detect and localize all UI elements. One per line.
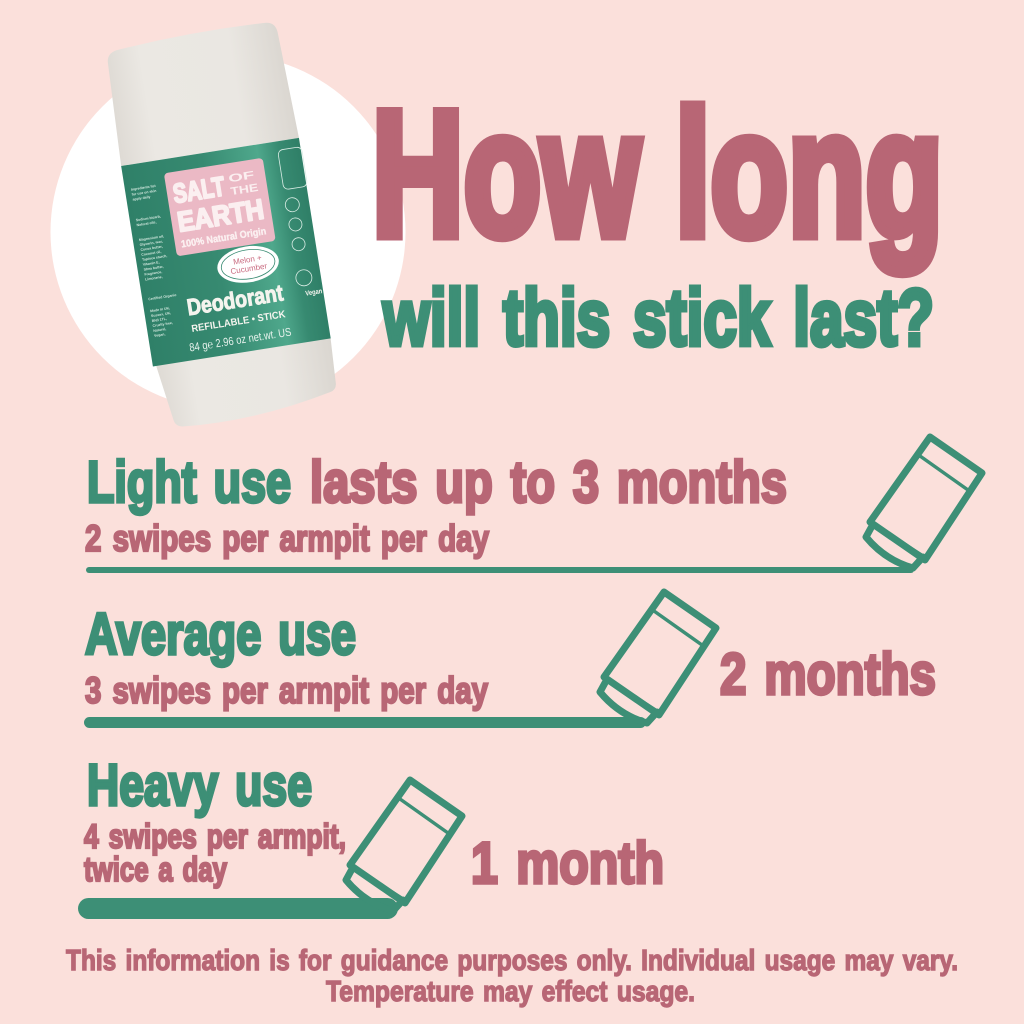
disclaimer	[66, 945, 958, 1008]
light use duration: lasts up to 3 months	[310, 450, 787, 515]
flavour badge	[215, 242, 282, 287]
logo panel	[164, 158, 276, 256]
icon: stick	[866, 437, 982, 568]
product type: REFILLABLE • STICK	[191, 309, 287, 335]
flavour badge: Melon +	[233, 253, 263, 267]
icon: stick	[346, 780, 462, 911]
heavy use bar	[78, 898, 398, 919]
logo panel: SALT	[171, 171, 227, 209]
logo panel: EARTH	[175, 193, 266, 238]
heavy use duration: 1 month	[471, 831, 664, 896]
ingredients list: for use on skin	[131, 189, 157, 197]
heavy use detail: 4 swipes per armpit,	[84, 818, 346, 856]
average use detail: 3 swipes per armpit per day	[85, 670, 488, 711]
ingredients list: Vegan,	[154, 332, 166, 338]
ingredients list: Natural oils,	[136, 220, 157, 227]
average use heading: Average use	[85, 602, 356, 667]
ingredients list: Sodium bicarb,	[136, 214, 161, 222]
logo panel: THE	[230, 182, 259, 198]
product: deodorant stick	[102, 19, 342, 431]
ingredients list: apply daily	[132, 195, 151, 202]
net weight: 84 g℮ 2.96 oz net.wt. US	[189, 326, 292, 354]
light use detail: 2 swipes per armpit per day	[85, 518, 489, 559]
ingredients list: Glycerin, wax,	[139, 239, 163, 247]
ingredients list: Coconut oil,	[141, 250, 162, 257]
row: light use	[85, 437, 982, 573]
ingredients list: Fragrance,	[144, 270, 162, 277]
ingredients list: BN3 1TL,	[151, 317, 167, 323]
stick base	[156, 336, 341, 431]
ingredients list: Vitamin E,	[143, 260, 160, 267]
green label	[121, 138, 331, 367]
stick cap	[102, 19, 299, 166]
white circle	[50, 54, 406, 410]
light use heading: Light use	[87, 450, 291, 515]
ingredients list: Natural,	[153, 327, 167, 333]
flavour badge: Cucumber	[230, 261, 268, 276]
icon: stick	[600, 592, 716, 723]
ingredients list: Sussex, UK,	[151, 311, 171, 318]
ingredients list: Shea butter,	[143, 265, 164, 272]
certification icons	[276, 147, 325, 299]
ingredients list: Limonene,	[145, 275, 163, 282]
heavy use detail line 2: twice a day	[84, 851, 227, 889]
ingredients list: Tapioca starch,	[142, 254, 168, 262]
row: heavy use	[78, 753, 664, 919]
row: average use	[84, 592, 936, 728]
heavy use heading: Heavy use	[87, 753, 312, 818]
disclaimer: Temperature may effect usage.	[326, 976, 695, 1008]
logo panel: 100% Natural Origin	[180, 226, 267, 251]
product name: Deodorant	[185, 279, 285, 320]
ingredients list	[131, 183, 183, 338]
ingredients list: Made in UK,	[150, 306, 170, 313]
average use duration: 2 months	[720, 642, 936, 707]
light use bar	[86, 567, 914, 573]
ingredients list: Cruelty free,	[152, 321, 173, 328]
ingredients list: Certified Organic	[148, 293, 177, 301]
ingredients list: Magnesium oil,	[139, 234, 164, 242]
ingredients list: Ingredients list	[131, 184, 157, 192]
ingredients list: Cocoa butter,	[140, 245, 163, 252]
certification icons: Vegan	[305, 288, 323, 298]
logo panel: OF	[228, 169, 256, 185]
average use bar	[84, 717, 646, 728]
